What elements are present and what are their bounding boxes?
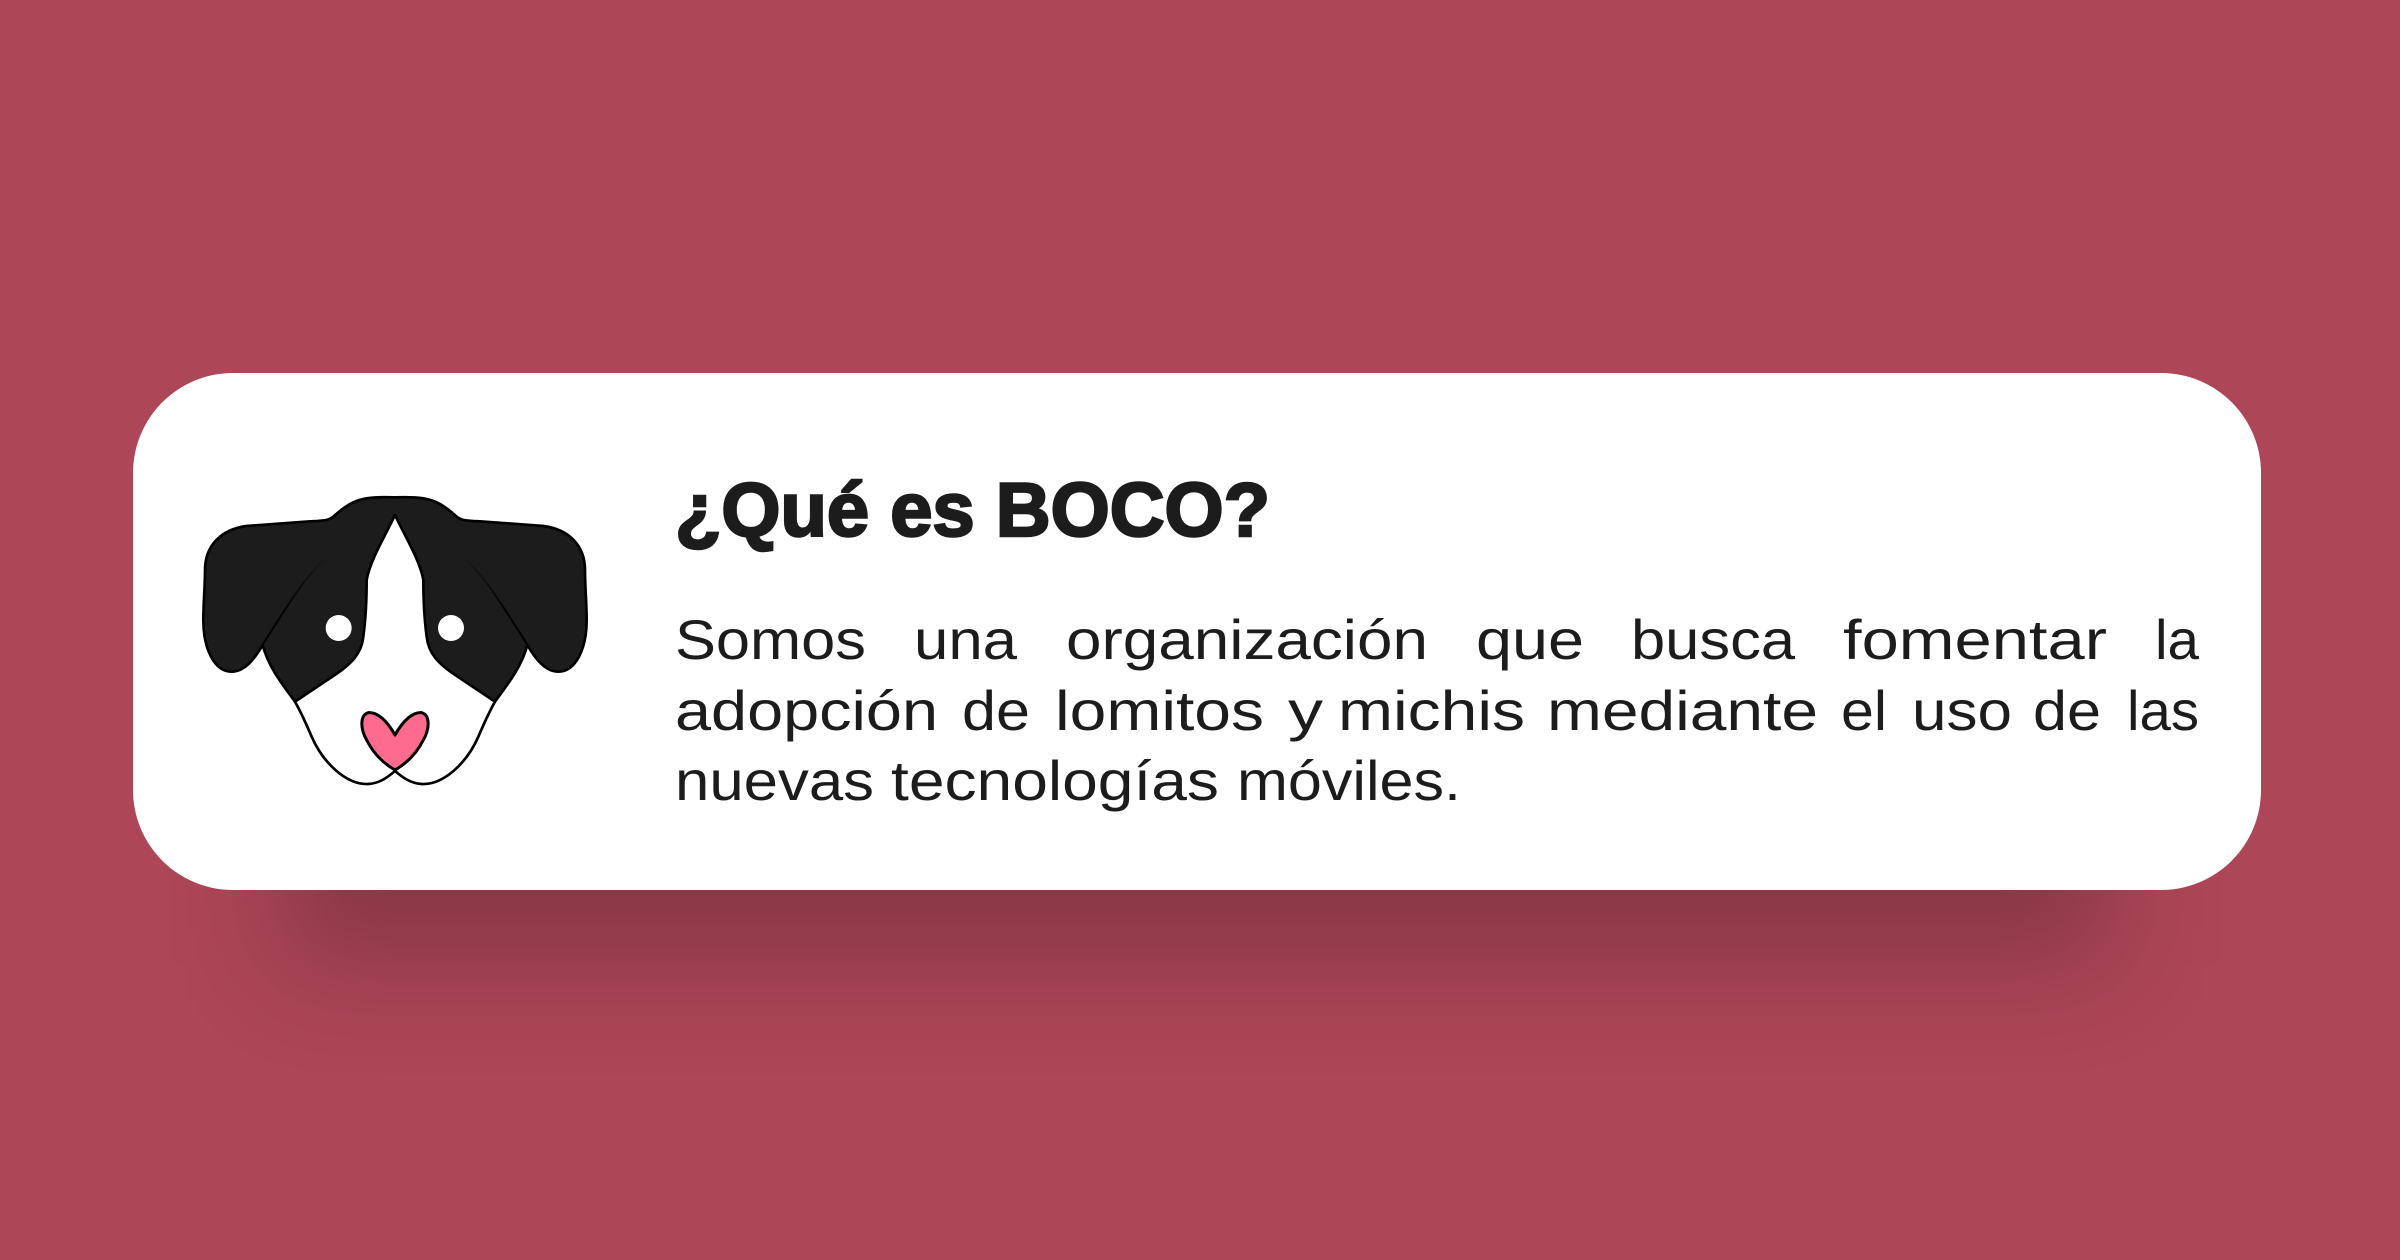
text block: description: mediante [1547,679,1818,742]
ear fold right [462,556,527,643]
card shadow [280,500,2110,965]
text block: description: uso [1912,679,2012,742]
text block: description: organización [1066,608,1428,671]
text block: description: michis [1338,679,1525,742]
heading: ¿Qué es BOCO? [675,468,1270,553]
text block: description: que [1476,608,1584,671]
white muzzle [263,570,527,784]
black head and ears [203,497,587,702]
icon: dog face [203,497,587,784]
text block: description: Somos [675,608,866,671]
text block: description: de [962,679,1030,742]
text block: description: el [1841,679,1887,742]
jaw lines [295,702,495,784]
text block: description: adopción [675,679,938,742]
text block: description: busca [1631,608,1796,671]
panel: white card [133,373,2261,890]
text block: description: tecnologías [891,749,1219,812]
text block: description: lomitos [1055,679,1264,742]
text block: description: de [2033,679,2101,742]
ear fold left [263,556,328,643]
text block: description: las [2127,679,2199,742]
text block: description: nuevas [675,749,874,812]
text block: description: fomentar [1843,608,2107,671]
eyes [326,615,464,641]
text block: description: móviles. [1237,749,1461,812]
heart nose [362,713,428,770]
text block: description [675,608,2200,812]
text block: description: la [2155,608,2200,671]
text block: description: y [1288,679,1323,742]
text block: description: una [914,608,1018,671]
